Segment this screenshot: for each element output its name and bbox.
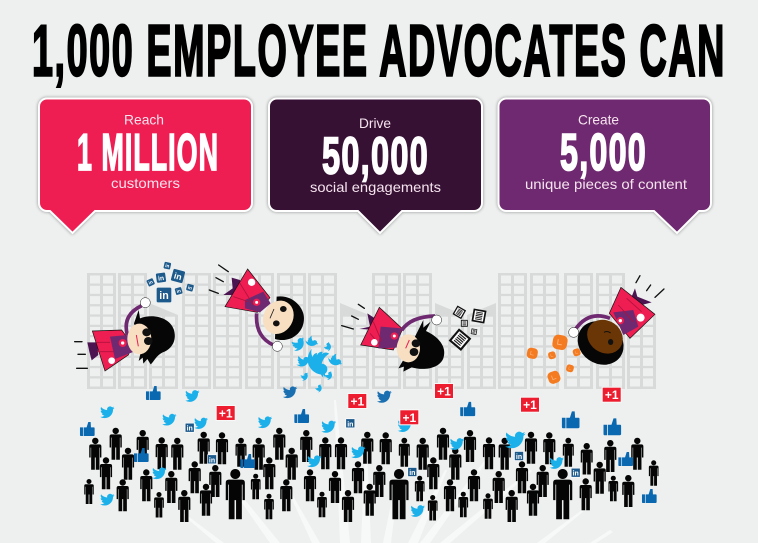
small linkedin badges: in [209, 457, 215, 464]
panel: create: unique pieces of content [525, 176, 687, 192]
panel: reach [39, 98, 252, 233]
linkedin icon cluster: in [158, 275, 165, 283]
city buildings [87, 273, 656, 389]
panel: drive: social engagements [310, 179, 441, 195]
google plus-one badges [216, 384, 621, 425]
linkedin icon cluster: in [173, 270, 183, 282]
small linkedin badges: in [573, 471, 579, 478]
panel: create [498, 98, 711, 233]
panel: create: Create [578, 112, 619, 128]
linkedin icon cluster: in [159, 290, 169, 302]
small linkedin badges: in [409, 470, 415, 477]
linkedin icon cluster: in [148, 279, 154, 286]
small linkedin badges: in [187, 426, 193, 433]
blog icon cluster [526, 334, 581, 385]
panel: drive [269, 98, 482, 233]
linkedin icon cluster [146, 262, 194, 302]
linkedin icon cluster: in [165, 263, 170, 269]
hero 1 [75, 298, 175, 371]
google plus-one badges: +1 [219, 406, 233, 420]
google plus-one badges: +1 [402, 411, 416, 425]
hero 2 [209, 265, 304, 351]
google plus-one badges: +1 [605, 388, 619, 402]
twitter icon cluster [291, 335, 343, 393]
panel: drive: 50,000 [322, 128, 429, 186]
linkedin icon cluster: in [176, 288, 181, 294]
document icon cluster [450, 306, 486, 350]
thumbs-up icons [80, 386, 657, 503]
panel: create: 5,000 [560, 124, 647, 182]
crowd of people [84, 428, 659, 522]
falling twitter birds [100, 386, 564, 517]
panel: drive: Drive [359, 115, 391, 131]
small linkedin badges: in [516, 454, 522, 461]
panel: reach: customers [111, 175, 180, 191]
panel: reach: 1 MILLION [77, 124, 219, 182]
hero 3 [342, 304, 444, 372]
linkedin icon cluster: in [187, 285, 193, 291]
google plus-one badges: +1 [523, 398, 537, 412]
panel: reach: Reach [124, 112, 164, 128]
google plus-one badges: +1 [350, 394, 364, 408]
hero 4 [569, 276, 664, 374]
small linkedin badges [185, 419, 580, 478]
small linkedin badges: in [347, 421, 353, 428]
google plus-one badges: +1 [437, 384, 451, 398]
